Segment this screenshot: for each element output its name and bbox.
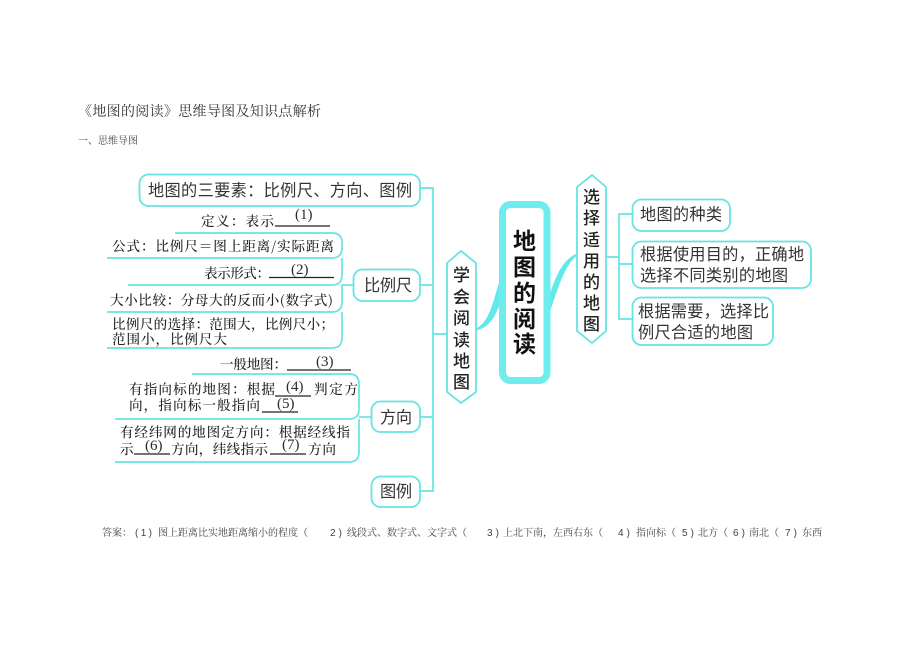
node: direction xyxy=(372,402,420,432)
leaf: definition: (1) xyxy=(295,207,312,223)
central node: 读 xyxy=(513,331,536,357)
node: choose by purpose: 根据使用目的，正确地 xyxy=(640,241,804,265)
node: map types: 地图的种类 xyxy=(640,201,722,225)
central node: 的 xyxy=(513,280,536,306)
hexagon: learn to read maps: 图 xyxy=(453,373,470,392)
mind map xyxy=(107,174,811,507)
answers: 6) xyxy=(733,528,745,539)
leaf: compass map: 有指向标的地图：根据 xyxy=(129,378,275,398)
answers: 2) xyxy=(330,528,342,539)
node: choose by purpose: 选择不同类别的地图 xyxy=(640,262,788,286)
answers: 南北（ xyxy=(749,524,779,539)
title: 《地图的阅读》思维导图及知识点解析 xyxy=(78,103,321,120)
central node: 图 xyxy=(513,254,536,280)
answers: 上北下南，左西右东（ xyxy=(503,524,603,539)
node: choose by need: 例尺合适的地图 xyxy=(638,319,753,343)
hexagon: choose suitable maps: 适 xyxy=(583,231,600,250)
curve: centre to right hexagon xyxy=(549,254,577,310)
answers: 5) xyxy=(682,528,694,539)
leaf: graticule map: (7) xyxy=(282,437,300,453)
leaf: forms: 表示形式： xyxy=(204,262,270,282)
leaf: general map xyxy=(220,353,351,373)
leaf: comparison: 大小比较：分母大的反而小(数字式) xyxy=(110,289,333,309)
leaf: graticule map: 示 xyxy=(120,438,134,458)
leaf: compass map xyxy=(129,378,358,414)
answers: 指向标（ xyxy=(636,524,676,539)
node: scale xyxy=(354,270,420,301)
hexagon: learn to read maps: 读 xyxy=(453,331,470,350)
leaf: graticule map: 有经纬网的地图定方向：根据经线指 xyxy=(120,421,350,441)
direction branch leaves xyxy=(115,353,371,462)
leaf: graticule map: 方向，纬线指示 xyxy=(171,438,268,458)
leaf: choice xyxy=(112,313,334,348)
answers: 答案： xyxy=(102,524,132,539)
hexagon: choose suitable maps: 地 xyxy=(583,294,600,313)
answers: 线段式、数字式、文字式（ xyxy=(347,524,467,539)
answers xyxy=(102,524,822,539)
leaf: compass map: 向，指向标一般指向 xyxy=(129,394,260,414)
node: scale: 比例尺 xyxy=(364,272,412,296)
hexagon: learn to read maps: 地 xyxy=(453,352,470,371)
leaf: graticule map xyxy=(120,421,350,458)
hexagon: choose suitable maps: 择 xyxy=(583,209,600,228)
hexagon: choose suitable maps: 选 xyxy=(583,188,600,207)
hexagon: learn to read maps: 阅 xyxy=(453,309,470,328)
hexagon: choose suitable maps xyxy=(577,175,606,343)
leaf: choice: 范围小，比例尺大 xyxy=(112,328,227,348)
hexagon: choose suitable maps: 的 xyxy=(583,273,600,292)
hexagon: learn to read maps: 学 xyxy=(453,265,470,285)
leaf: general map: (3) xyxy=(316,354,334,370)
central node: 阅 xyxy=(513,306,536,332)
node: three elements: 地图的三要素：比例尺、方向、图例 xyxy=(148,177,412,201)
node: legend: 图例 xyxy=(380,478,412,502)
curve: centre to left hexagon xyxy=(476,284,500,330)
hexagon: choose suitable maps: 用 xyxy=(583,252,600,271)
right trunk connectors xyxy=(607,214,632,319)
leaf: definition: 定义：表示 xyxy=(201,210,274,230)
leaf: graticule map: (6) xyxy=(145,438,162,454)
leaf: general map: 一般地图： xyxy=(220,353,287,373)
hexagon: choose suitable maps: 图 xyxy=(583,315,600,334)
leaf: compass map: (5) xyxy=(277,396,294,412)
answers: (1) xyxy=(135,528,152,539)
left trunk connectors xyxy=(420,188,447,491)
leaf: choice: 比例尺的选择：范围大，比例尺小； xyxy=(112,313,334,333)
node: direction: 方向 xyxy=(380,404,412,428)
section heading: 一、思维导图 xyxy=(78,134,138,147)
hexagon: learn to read maps xyxy=(447,251,476,403)
answers: 3) xyxy=(487,528,499,539)
leaf: forms: (2) xyxy=(291,262,308,278)
node: choose by purpose xyxy=(632,241,811,288)
answers: 东西 xyxy=(802,524,822,539)
leaf: definition xyxy=(201,207,330,230)
node: choose by need xyxy=(632,298,773,345)
node: map types xyxy=(632,200,730,231)
node: choose by need: 根据需要，选择比 xyxy=(638,298,769,322)
leaf: formula: 公式：比例尺＝图上距离/实际距离 xyxy=(112,235,334,255)
answers: 4) xyxy=(618,528,630,539)
answers: 图上距离比实地距离缩小的程度（ xyxy=(158,524,308,539)
leaf: graticule map: 方向 xyxy=(308,438,336,458)
answers: 北方（ xyxy=(698,524,728,539)
leaf: compass map: 判定方 xyxy=(314,378,358,398)
hexagon: learn to read maps: 会 xyxy=(453,288,470,307)
leaf: forms xyxy=(204,262,334,282)
leaf: compass map: (4) xyxy=(286,379,304,395)
node: legend xyxy=(372,476,420,507)
central node xyxy=(502,204,547,380)
central node: 地 xyxy=(513,228,536,254)
scale branch leaves xyxy=(107,207,353,348)
answers: 7) xyxy=(785,528,797,539)
